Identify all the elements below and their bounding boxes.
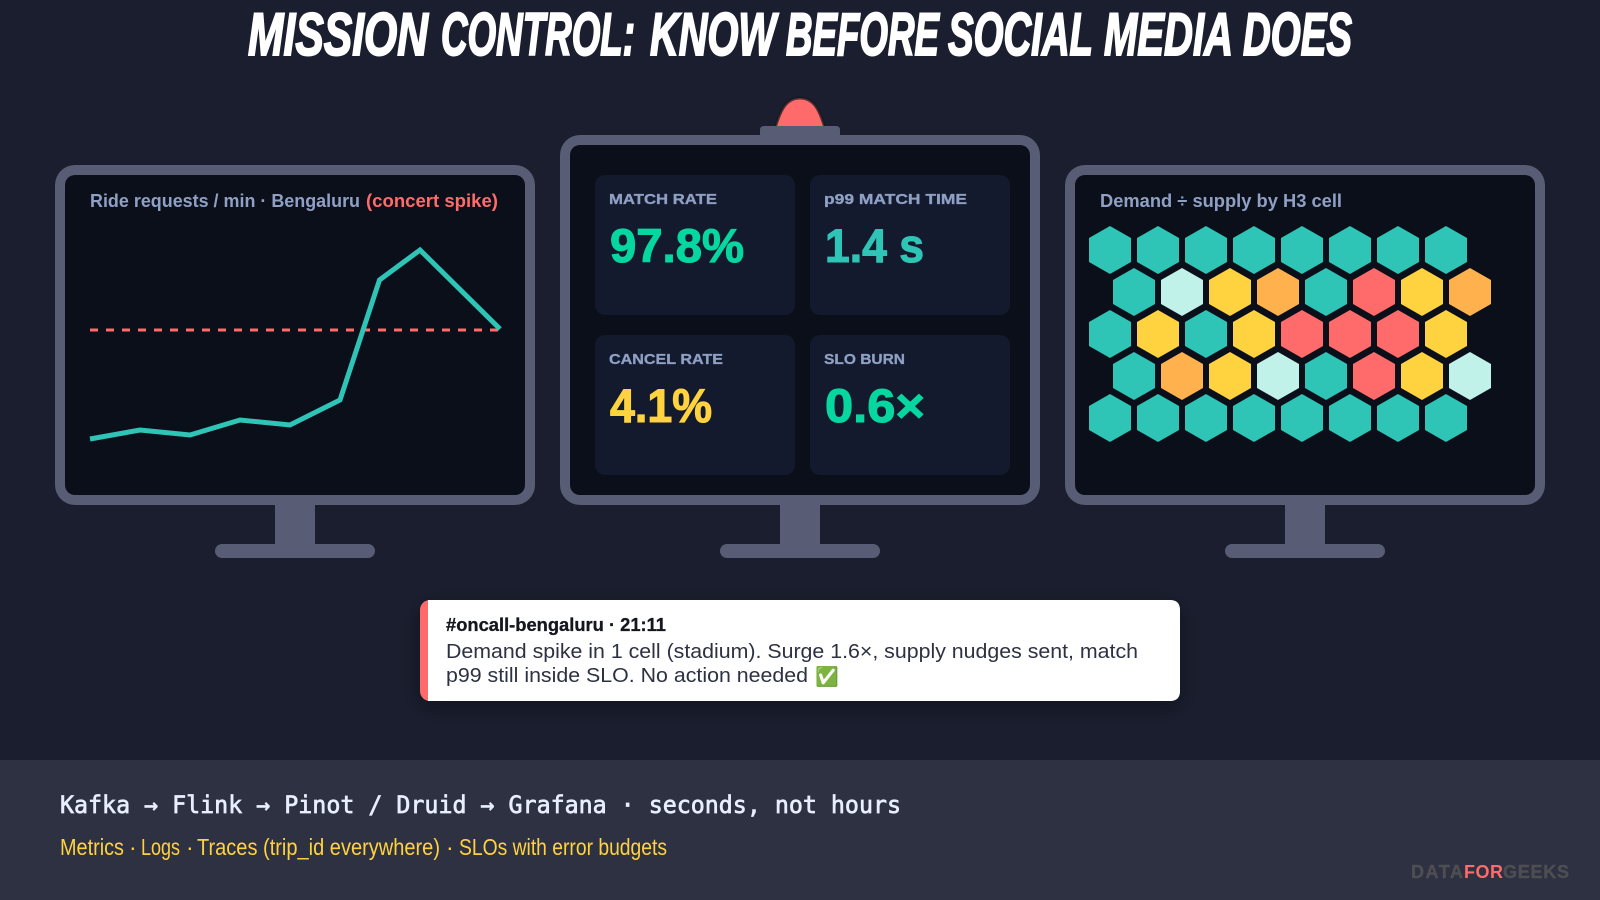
KPI card: match rate: 97.8% [610, 219, 744, 272]
monitor screen [65, 175, 525, 495]
monitor frame [1065, 165, 1545, 505]
chart heading: Ride requests / min · Bengaluru [90, 190, 360, 211]
pipeline text: Kafka → Flink → Pinot / Druid → Grafana · seconds, not hours [60, 791, 901, 819]
observability text: · [129, 834, 137, 860]
KPI card: match rate: MATCH RATE [609, 191, 717, 208]
monitor frame [55, 165, 535, 505]
observability text: SLOs with error budgets [459, 834, 667, 860]
observability text: Metrics [60, 834, 124, 860]
monitor stand [1225, 500, 1385, 558]
callout heading: #oncall-bengaluru · 21:11 [446, 615, 666, 635]
monitor frame [560, 135, 1040, 505]
KPI card: SLO burn [810, 335, 1010, 475]
callout body [446, 640, 1138, 688]
observability text [60, 834, 667, 860]
panel: right monitor, H3 heatmap [1065, 165, 1545, 558]
callout body: ✅ [815, 665, 839, 688]
KPI card: SLO burn: SLO BURN [824, 351, 905, 368]
monitor stand [215, 500, 375, 558]
title: MISSION [248, 1, 429, 68]
callout body: Demand spike in 1 cell (stadium). Surge 1.6×, supply nudges sent, match [446, 640, 1138, 663]
hexagon heatmap [1089, 226, 1491, 442]
KPI card: p99 match time: 1.4 s [825, 219, 924, 272]
footer band [0, 760, 1600, 900]
brand mark: FOR [1464, 862, 1503, 882]
line chart: threshold and demand line [90, 250, 500, 439]
observability text: · [446, 834, 454, 860]
brand mark: GEEKS [1503, 862, 1569, 882]
title: MEDIA [1104, 1, 1233, 68]
monitor screen [1075, 175, 1535, 495]
brand mark: DATA [1411, 862, 1463, 882]
chart heading [90, 190, 498, 211]
KPI card: cancel rate: 4.1% [610, 379, 712, 432]
title: BEFORE [786, 1, 940, 68]
callout body: p99 still inside SLO. No action needed [446, 664, 808, 687]
KPI card: p99 match time: p99 MATCH TIME [824, 191, 967, 208]
title: DOES [1243, 1, 1352, 68]
observability text: · [186, 834, 194, 860]
monitor stand [720, 500, 880, 558]
alarm beacon [760, 98, 840, 140]
title: KNOW [650, 1, 779, 68]
title: CONTROL: [441, 1, 635, 68]
KPI card: p99 match time [810, 175, 1010, 315]
monitor screen [570, 145, 1030, 495]
KPI card: SLO burn: 0.6× [825, 379, 925, 432]
title [248, 1, 1352, 68]
chart heading: (concert spike) [366, 190, 498, 211]
panel: center monitor, KPIs [560, 98, 1040, 558]
panel: left monitor, ride requests [55, 165, 535, 558]
title: SOCIAL [948, 1, 1093, 68]
observability text: Logs [141, 834, 180, 860]
heatmap heading: Demand ÷ supply by H3 cell [1100, 190, 1342, 211]
KPI card: cancel rate [595, 335, 795, 475]
KPI card: match rate [595, 175, 795, 315]
callout: on-call message [420, 600, 1180, 701]
observability text: Traces (trip_id everywhere) [197, 834, 440, 860]
KPI card: cancel rate: CANCEL RATE [609, 351, 723, 368]
brand mark [1411, 862, 1569, 882]
